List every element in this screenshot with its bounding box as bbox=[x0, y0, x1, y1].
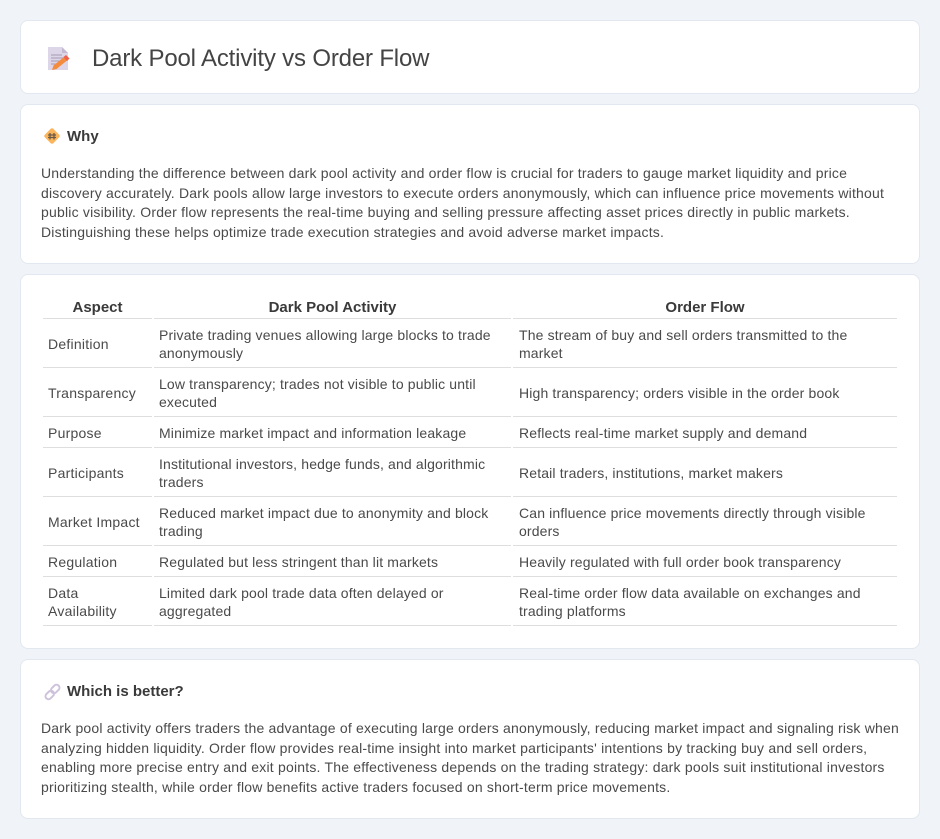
row: data availability bbox=[48, 585, 117, 619]
icon: warning diamond bbox=[44, 128, 60, 144]
text: why paragraph: Distinguishing these helps optimize trade execution strategies and avoid adverse market impacts. bbox=[41, 224, 664, 240]
comparison table: Minimize market impact and information leakage bbox=[159, 425, 466, 441]
row: definition: Definition bbox=[48, 336, 109, 352]
comparison table: High transparency; orders visible in the order book bbox=[519, 385, 839, 401]
comparison table: The stream of buy and sell orders transmitted to the bbox=[519, 327, 847, 343]
heading: which is better: Which is better? bbox=[67, 683, 184, 700]
row: participants: Participants bbox=[48, 465, 124, 481]
row: data availability: Data bbox=[48, 585, 79, 601]
table header: order flow: Order Flow bbox=[665, 299, 745, 316]
comparison table: Institutional investors, hedge funds, and algorithmic bbox=[159, 456, 485, 472]
panel: which is better bbox=[20, 659, 920, 819]
header card bbox=[20, 20, 920, 94]
text: which is better paragraph: analyzing hidden liquidity. Order flow provides real-time insight into market participants' intentions by tracking buy and sell orders, bbox=[41, 740, 867, 756]
comparison table: Real-time order flow data available on exchanges and bbox=[519, 585, 861, 601]
text: which is better paragraph bbox=[41, 720, 899, 795]
table header: aspect: Aspect bbox=[72, 299, 123, 316]
comparison table: Low transparency; trades not visible to public until bbox=[159, 376, 476, 392]
comparison table: Regulated but less stringent than lit markets bbox=[159, 554, 438, 570]
text: which is better paragraph: enabling more precise entry and exit points. The effectiveness depends on the trading strategy: dark pools suit institutional investors bbox=[41, 759, 885, 775]
comparison table: Reduced market impact due to anonymity and block bbox=[159, 505, 488, 521]
text: why paragraph: public visibility. Order flow represents the real-time buying and selling pressure affecting asset prices directly in public markets. bbox=[41, 204, 850, 220]
heading: why: Why bbox=[67, 128, 99, 145]
panel: why bbox=[20, 104, 920, 264]
comparison table: Private trading venues allowing large blocks to trade bbox=[159, 327, 491, 343]
row: market impact: Market Impact bbox=[48, 514, 140, 530]
row: regulation: Regulation bbox=[48, 554, 117, 570]
text: which is better paragraph: prioritizing stealth, while order flow benefits active traders focused on short-term price movements. bbox=[41, 778, 670, 794]
comparison table: Limited dark pool trade data often delayed or bbox=[159, 585, 444, 601]
text: why paragraph: Understanding the difference between dark pool activity and order flow is crucial for traders to gauge market liquidity and price bbox=[41, 165, 847, 181]
row: transparency: Transparency bbox=[48, 385, 136, 401]
comparison table: executed bbox=[159, 394, 217, 410]
comparison table: market bbox=[519, 345, 563, 361]
comparison table: orders bbox=[519, 523, 560, 539]
comparison table: trading bbox=[159, 523, 203, 539]
icon: link bbox=[44, 684, 60, 700]
comparison table: traders bbox=[159, 474, 204, 490]
comparison table: aggregated bbox=[159, 603, 231, 619]
row: data availability: Availability bbox=[48, 603, 117, 619]
text: why paragraph bbox=[41, 165, 884, 240]
row: purpose: Purpose bbox=[48, 425, 102, 441]
comparison table bbox=[43, 299, 897, 626]
table header: dark pool activity: Dark Pool Activity bbox=[269, 299, 396, 316]
comparison table: Can influence price movements directly through visible bbox=[519, 505, 866, 521]
comparison table: Heavily regulated with full order book transparency bbox=[519, 554, 841, 570]
comparison table: Reflects real-time market supply and demand bbox=[519, 425, 807, 441]
text: which is better paragraph: Dark pool activity offers traders the advantage of executing large orders anonymously, reducing market impact and signaling risk when bbox=[41, 720, 899, 736]
title: Dark Pool Activity vs Order Flow bbox=[92, 45, 429, 72]
text: why paragraph: discovery accurately. Dark pools allow large investors to execute orders anonymously, which can influence price movements without bbox=[41, 184, 884, 200]
panel: comparison table bbox=[20, 274, 920, 649]
comparison table: Retail traders, institutions, market makers bbox=[519, 465, 783, 481]
comparison table: trading platforms bbox=[519, 603, 626, 619]
icon: document with pencil bbox=[48, 47, 70, 70]
comparison table: anonymously bbox=[159, 345, 243, 361]
